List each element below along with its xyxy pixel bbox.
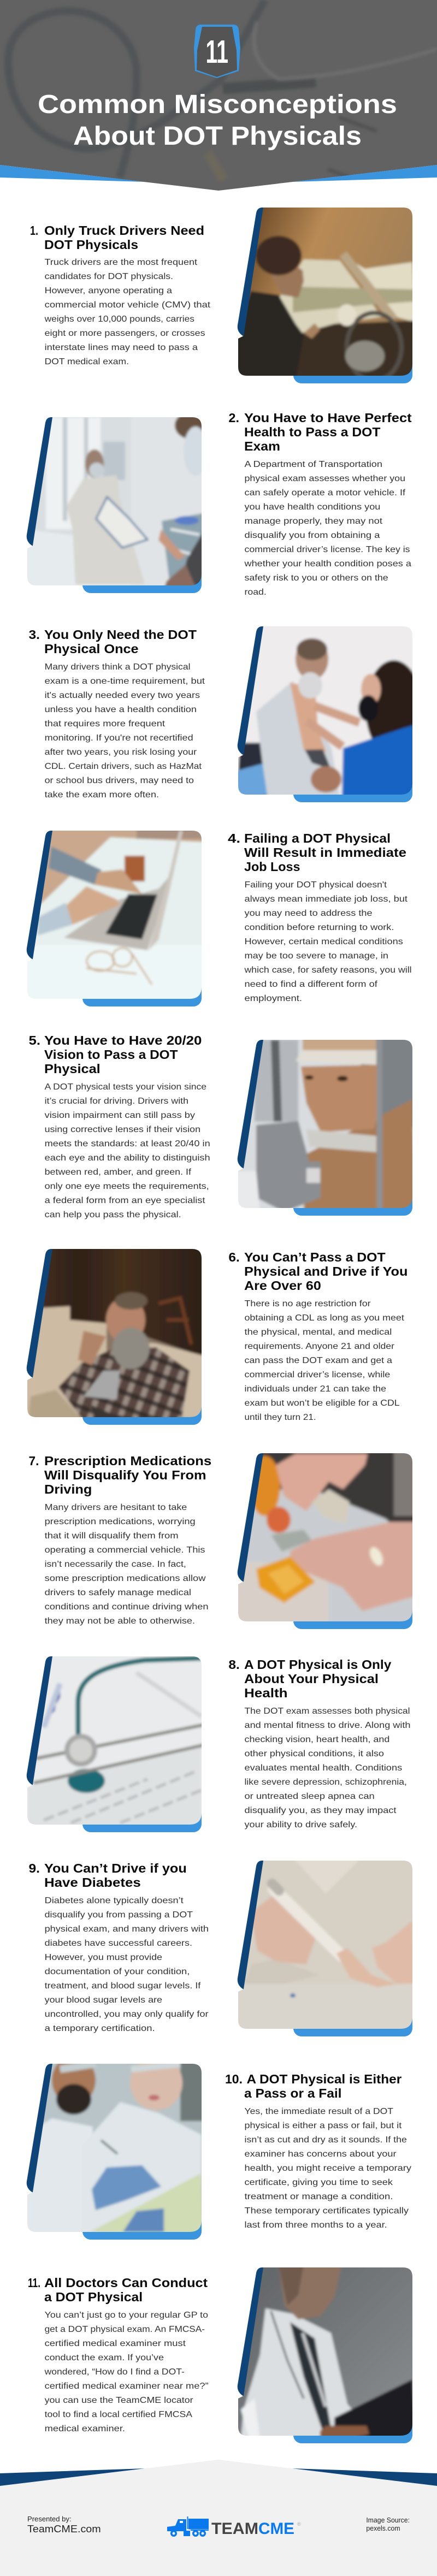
image: stethoscope on medical form: [25, 1654, 205, 1832]
body text: requirements. Anyone 21 and older: [245, 1342, 395, 1351]
heading: Only Truck Drivers Need: [44, 223, 204, 238]
body text: eight or more passengers, or crosses: [45, 329, 205, 338]
image source text: pexels.com: [366, 2525, 400, 2532]
blue ribbon right: [292, 165, 437, 182]
image: pills poured into hand: [235, 1450, 416, 1629]
body text: disqualify you, as they may impact: [245, 1806, 397, 1815]
body text: commercial driver’s license. The key is: [245, 545, 410, 554]
body text: medical examiner.: [45, 2424, 125, 2433]
body text: other physical conditions, it also: [245, 1749, 384, 1758]
body text: [45, 662, 205, 800]
body text: employment.: [245, 994, 302, 1003]
body text: [245, 2107, 411, 2230]
body text: isn’t necessarily the case. In fact,: [45, 1560, 186, 1569]
body text: [44, 2311, 209, 2433]
heading: Physical and Drive if You: [244, 1264, 408, 1278]
body text: However, certain medical conditions: [245, 937, 403, 946]
body text: can help you pass the physical.: [45, 1210, 181, 1219]
heading: [28, 1861, 187, 1890]
body text: or school bus drivers, may need to: [45, 776, 194, 785]
body text: conduct the exam. If you’ve: [45, 2353, 164, 2362]
presented by text: Presented by:: [27, 2515, 72, 2523]
body text: obtaining a CDL as long as you meet: [245, 1313, 404, 1323]
footer: [0, 2460, 437, 2576]
body text: examiner has concerns about your: [245, 2149, 397, 2159]
body text: you can use the TeamCME locator: [45, 2396, 193, 2405]
body text: manage properly, they may not: [245, 517, 383, 526]
image: medical office consultation: [25, 412, 208, 593]
body text: meets the standards: at least 20/40 in: [45, 1139, 210, 1148]
body text: tool to find a local certified FMCSA: [45, 2410, 192, 2419]
body text: commercial driver’s license, while: [245, 1370, 390, 1379]
body text: A DOT physical tests your vision since: [45, 1082, 206, 1092]
body text: monitoring. If you're not recertified: [45, 733, 193, 743]
panel: misconception 2: [25, 411, 412, 597]
body text: your blood sugar levels are: [45, 1995, 162, 2005]
heading: Will Disqualify You From: [44, 1468, 206, 1482]
panel: misconception 11: [28, 2265, 416, 2443]
panel: misconception 10: [25, 2056, 411, 2240]
body text: they may not be able to otherwise.: [45, 1616, 195, 1626]
body text: [45, 1082, 210, 1219]
body text: checking vision, heart health, and: [245, 1735, 389, 1744]
body text: uncontrolled, you may only qualify for: [45, 2010, 209, 2019]
body text: You can’t just go to your regular GP to: [45, 2311, 208, 2320]
body text: [245, 1299, 404, 1422]
body text: isn’t as cut and dry as it sounds. If the: [245, 2135, 407, 2145]
badge with number 11: [194, 25, 240, 78]
body text: candidates for DOT physicals.: [45, 272, 173, 281]
image source text: Image Source:: [366, 2516, 410, 2524]
heading: Driving: [44, 1482, 92, 1496]
heading: [225, 2072, 401, 2100]
image: hands with blood glucose lancet: [235, 1858, 416, 2036]
body text: [44, 258, 211, 366]
heading: 2.: [228, 411, 239, 425]
body text: treatment, and blood sugar levels. If: [45, 1981, 201, 1991]
heading: You Can’t Pass a DOT: [244, 1250, 386, 1264]
heading: Health to Pass a DOT: [244, 425, 380, 439]
heading: [28, 627, 197, 656]
body text: There is no age restriction for: [245, 1299, 371, 1308]
body text: [245, 1707, 411, 1829]
image: hands on laptop with glasses: [25, 828, 205, 1006]
navy ribbon left: [0, 2468, 145, 2486]
body text: that it will disqualify them from: [45, 1531, 178, 1541]
body text: may be too severe to manage, in: [245, 951, 388, 961]
badge with number 11: 11: [205, 34, 228, 70]
body text: individuals under 21 can take the: [245, 1384, 386, 1394]
body text: Yes, the immediate result of a DOT: [245, 2107, 393, 2116]
heading: [28, 1033, 202, 1076]
heading: [30, 223, 204, 252]
body text: it's actually needed every two years: [45, 691, 200, 700]
body text: treatment or manage a condition.: [245, 2192, 393, 2201]
body text: operating a commercial vehicle. This: [45, 1545, 205, 1555]
body text: [244, 880, 412, 1003]
heading: You Have to Have 20/20: [44, 1033, 202, 1047]
heading: [228, 1657, 392, 1700]
body text: These temporary certificates typically: [245, 2206, 409, 2216]
header banner: [0, 0, 437, 191]
heading: Are Over 60: [244, 1278, 321, 1293]
image: man at eye exam machine: [235, 1037, 416, 1216]
body text: weighs over 10,000 pounds, carries: [44, 315, 194, 324]
heading: Physical: [44, 1062, 101, 1076]
body text: [244, 460, 411, 597]
heading: 10.: [225, 2072, 243, 2086]
body text: Many drivers are hesitant to take: [45, 1503, 187, 1512]
body text: health, you might receive a temporary: [245, 2164, 411, 2173]
body text: a federal form from an eye specialist: [45, 1196, 205, 1205]
body text: Many drivers think a DOT physical: [45, 662, 190, 672]
image source text: [366, 2516, 410, 2532]
body text: unless you have a health condition: [45, 705, 197, 714]
panel: misconception 7: [28, 1450, 416, 1629]
heading: [28, 1454, 211, 1496]
body text: the physical, mental, and medical: [245, 1328, 392, 1337]
heading: Have Diabetes: [44, 1875, 141, 1890]
heading: You Can’t Drive if you: [44, 1861, 187, 1875]
body text: exam but won’t be eligible for a CDL: [245, 1399, 400, 1408]
body text: disqualify you from obtaining a: [245, 531, 380, 540]
heading: Job Loss: [244, 860, 300, 874]
heading: A DOT Physical is Only: [244, 1657, 392, 1672]
body text: prescription medications, worrying: [45, 1517, 196, 1526]
image: nurse examining patient: [235, 624, 422, 802]
body text: road.: [245, 588, 267, 597]
heading: About Your Physical: [244, 1672, 379, 1686]
heading: Vision to Pass a DOT: [44, 1047, 178, 1062]
title: About DOT Physicals: [73, 122, 362, 151]
body text: last from three months to a year.: [245, 2220, 387, 2230]
body text: you may need to address the: [245, 909, 373, 918]
image: doctor with tablet: [235, 2265, 416, 2443]
body text: that requires more frequent: [45, 719, 166, 729]
heading: a DOT Physical: [44, 2290, 143, 2304]
heading: Exam: [244, 439, 280, 453]
heading: You Only Need the DOT: [44, 627, 197, 642]
body text: after two years, you risk losing your: [45, 748, 197, 757]
body text: like severe depression, schizophrenia,: [245, 1778, 407, 1787]
heading: 8.: [228, 1657, 240, 1672]
body text: interstate lines may need to pass a: [45, 343, 198, 352]
body text: wondered, “How do I find a DOT-: [44, 2367, 185, 2377]
body text: Failing your DOT physical doesn't: [245, 880, 387, 890]
body text: disqualify you from passing a DOT: [45, 1910, 193, 1920]
body text: each eye and the ability to distinguish: [45, 1153, 210, 1163]
heading: 3.: [28, 627, 40, 642]
image: older man reading on sofa: [25, 1246, 205, 1425]
heading: [28, 2276, 208, 2304]
body text: and mental fitness to drive. Along with: [245, 1721, 411, 1730]
body text: exam is a one-time requirement, but: [45, 677, 205, 686]
panel: misconception 9: [28, 1858, 416, 2036]
heading: 6.: [228, 1250, 240, 1264]
body text: commercial motor vehicle (CMV) that: [45, 300, 211, 310]
body text: documentation of your condition,: [45, 1967, 190, 1976]
navy ribbon right: [292, 2468, 437, 2486]
body text: always mean immediate job loss, but: [245, 895, 408, 904]
heading: A DOT Physical is Either: [247, 2072, 401, 2086]
heading: DOT Physicals: [44, 238, 138, 252]
body text: A Department of Transportation: [245, 460, 382, 469]
panel: misconception 8: [25, 1654, 411, 1832]
body text: However, anyone operating a: [45, 286, 172, 295]
heading: 1.: [30, 223, 38, 238]
heading: Physical Once: [44, 642, 139, 656]
body text: Truck drivers are the most frequent: [45, 258, 198, 267]
body text: diabetes have successful careers.: [45, 1939, 192, 1948]
body text: physical exam, and many drivers with: [45, 1924, 209, 1934]
body text: [45, 1503, 209, 1626]
heading: Health: [244, 1686, 287, 1700]
body text: vision impairment can still pass by: [45, 1111, 195, 1120]
body text: need to find a different form of: [245, 980, 377, 989]
heading: 4.: [228, 831, 240, 845]
body text: you have health conditions you: [245, 502, 380, 512]
panel: misconception 5: [28, 1033, 416, 1219]
panel: misconception 3: [28, 624, 422, 802]
body text: using corrective lenses if their vision: [45, 1125, 200, 1134]
logo: TeamCME truck: ®: [297, 2521, 301, 2527]
logo: TeamCME truck: [167, 2516, 301, 2538]
body text: it’s crucial for driving. Drivers with: [45, 1097, 188, 1106]
heading: a Pass or a Fail: [244, 2086, 342, 2100]
heading: 11.: [28, 2276, 40, 2290]
body text: can pass the DOT exam and get a: [245, 1356, 392, 1365]
body text: which case, for safety reasons, you will: [244, 966, 412, 975]
body text: conditions and continue driving when: [45, 1602, 209, 1612]
heading: [228, 1250, 408, 1293]
presented by text: TeamCME.com: [27, 2524, 101, 2534]
panel: misconception 6: [25, 1246, 408, 1425]
heading: Failing a DOT Physical: [244, 831, 391, 845]
heading: [228, 411, 412, 453]
body text: condition before returning to work.: [245, 923, 394, 932]
heading: Prescription Medications: [44, 1454, 211, 1468]
body text: Diabetes alone typically doesn’t: [45, 1896, 184, 1905]
presented by text: [27, 2515, 101, 2534]
body text: safety risk to you or others on the: [245, 573, 388, 583]
body text: certified medical examiner must: [45, 2339, 186, 2348]
body text: some prescription medications allow: [45, 1574, 206, 1583]
panel: misconception 1: [30, 205, 416, 383]
body text: get a DOT physical exam. An FMCSA-: [45, 2325, 205, 2334]
heading: [228, 831, 406, 874]
body text: However, you must provide: [45, 1953, 162, 1962]
logo: TeamCME truck: TEAM: [211, 2520, 258, 2538]
logo: TeamCME truck: CME: [258, 2520, 294, 2538]
body text: until they turn 21.: [245, 1413, 316, 1422]
heading: You Have to Have Perfect: [244, 411, 412, 425]
body text: CDL. Certain drivers, such as HazMat: [45, 762, 202, 771]
image: driver in truck cab: [235, 205, 416, 383]
body text: certified medical examiner near me?”: [45, 2382, 209, 2391]
panel: misconception 4: [25, 828, 412, 1006]
body text: only one eye meets the requirements,: [45, 1182, 209, 1191]
body text: take the exam more often.: [45, 790, 159, 800]
body text: whether your health condition poses a: [244, 559, 411, 569]
body text: can safely operate a motor vehicle. If: [245, 488, 406, 498]
heading: 7.: [28, 1454, 39, 1468]
title: Common Misconceptions: [38, 90, 397, 119]
heading: Will Result in Immediate: [244, 845, 406, 860]
body text: or untreated sleep apnea can: [245, 1792, 375, 1801]
icon: stethoscope background photo: [8, 0, 437, 180]
body text: The DOT exam assesses both physical: [245, 1707, 410, 1716]
blue ribbon left: [0, 165, 145, 182]
body text: a temporary certification.: [45, 2024, 155, 2033]
body text: physical exam assesses whether you: [245, 474, 405, 483]
body text: evaluates mental health. Conditions: [245, 1763, 402, 1773]
body text: physical is either a pass or fail, but it: [245, 2121, 402, 2130]
heading: All Doctors Can Conduct: [44, 2276, 208, 2290]
body text: between red, amber, and green. If: [45, 1168, 192, 1177]
title: [38, 90, 397, 151]
body text: certificate, giving you time to seek: [245, 2178, 393, 2187]
body text: DOT medical exam.: [45, 357, 129, 366]
body text: [45, 1896, 209, 2033]
image: two doctors with clipboard: [25, 2056, 205, 2240]
heading: 5.: [28, 1033, 40, 1047]
body text: drivers to safely manage medical: [45, 1588, 191, 1597]
body text: your ability to drive safely.: [245, 1820, 357, 1829]
heading: 9.: [28, 1861, 40, 1875]
